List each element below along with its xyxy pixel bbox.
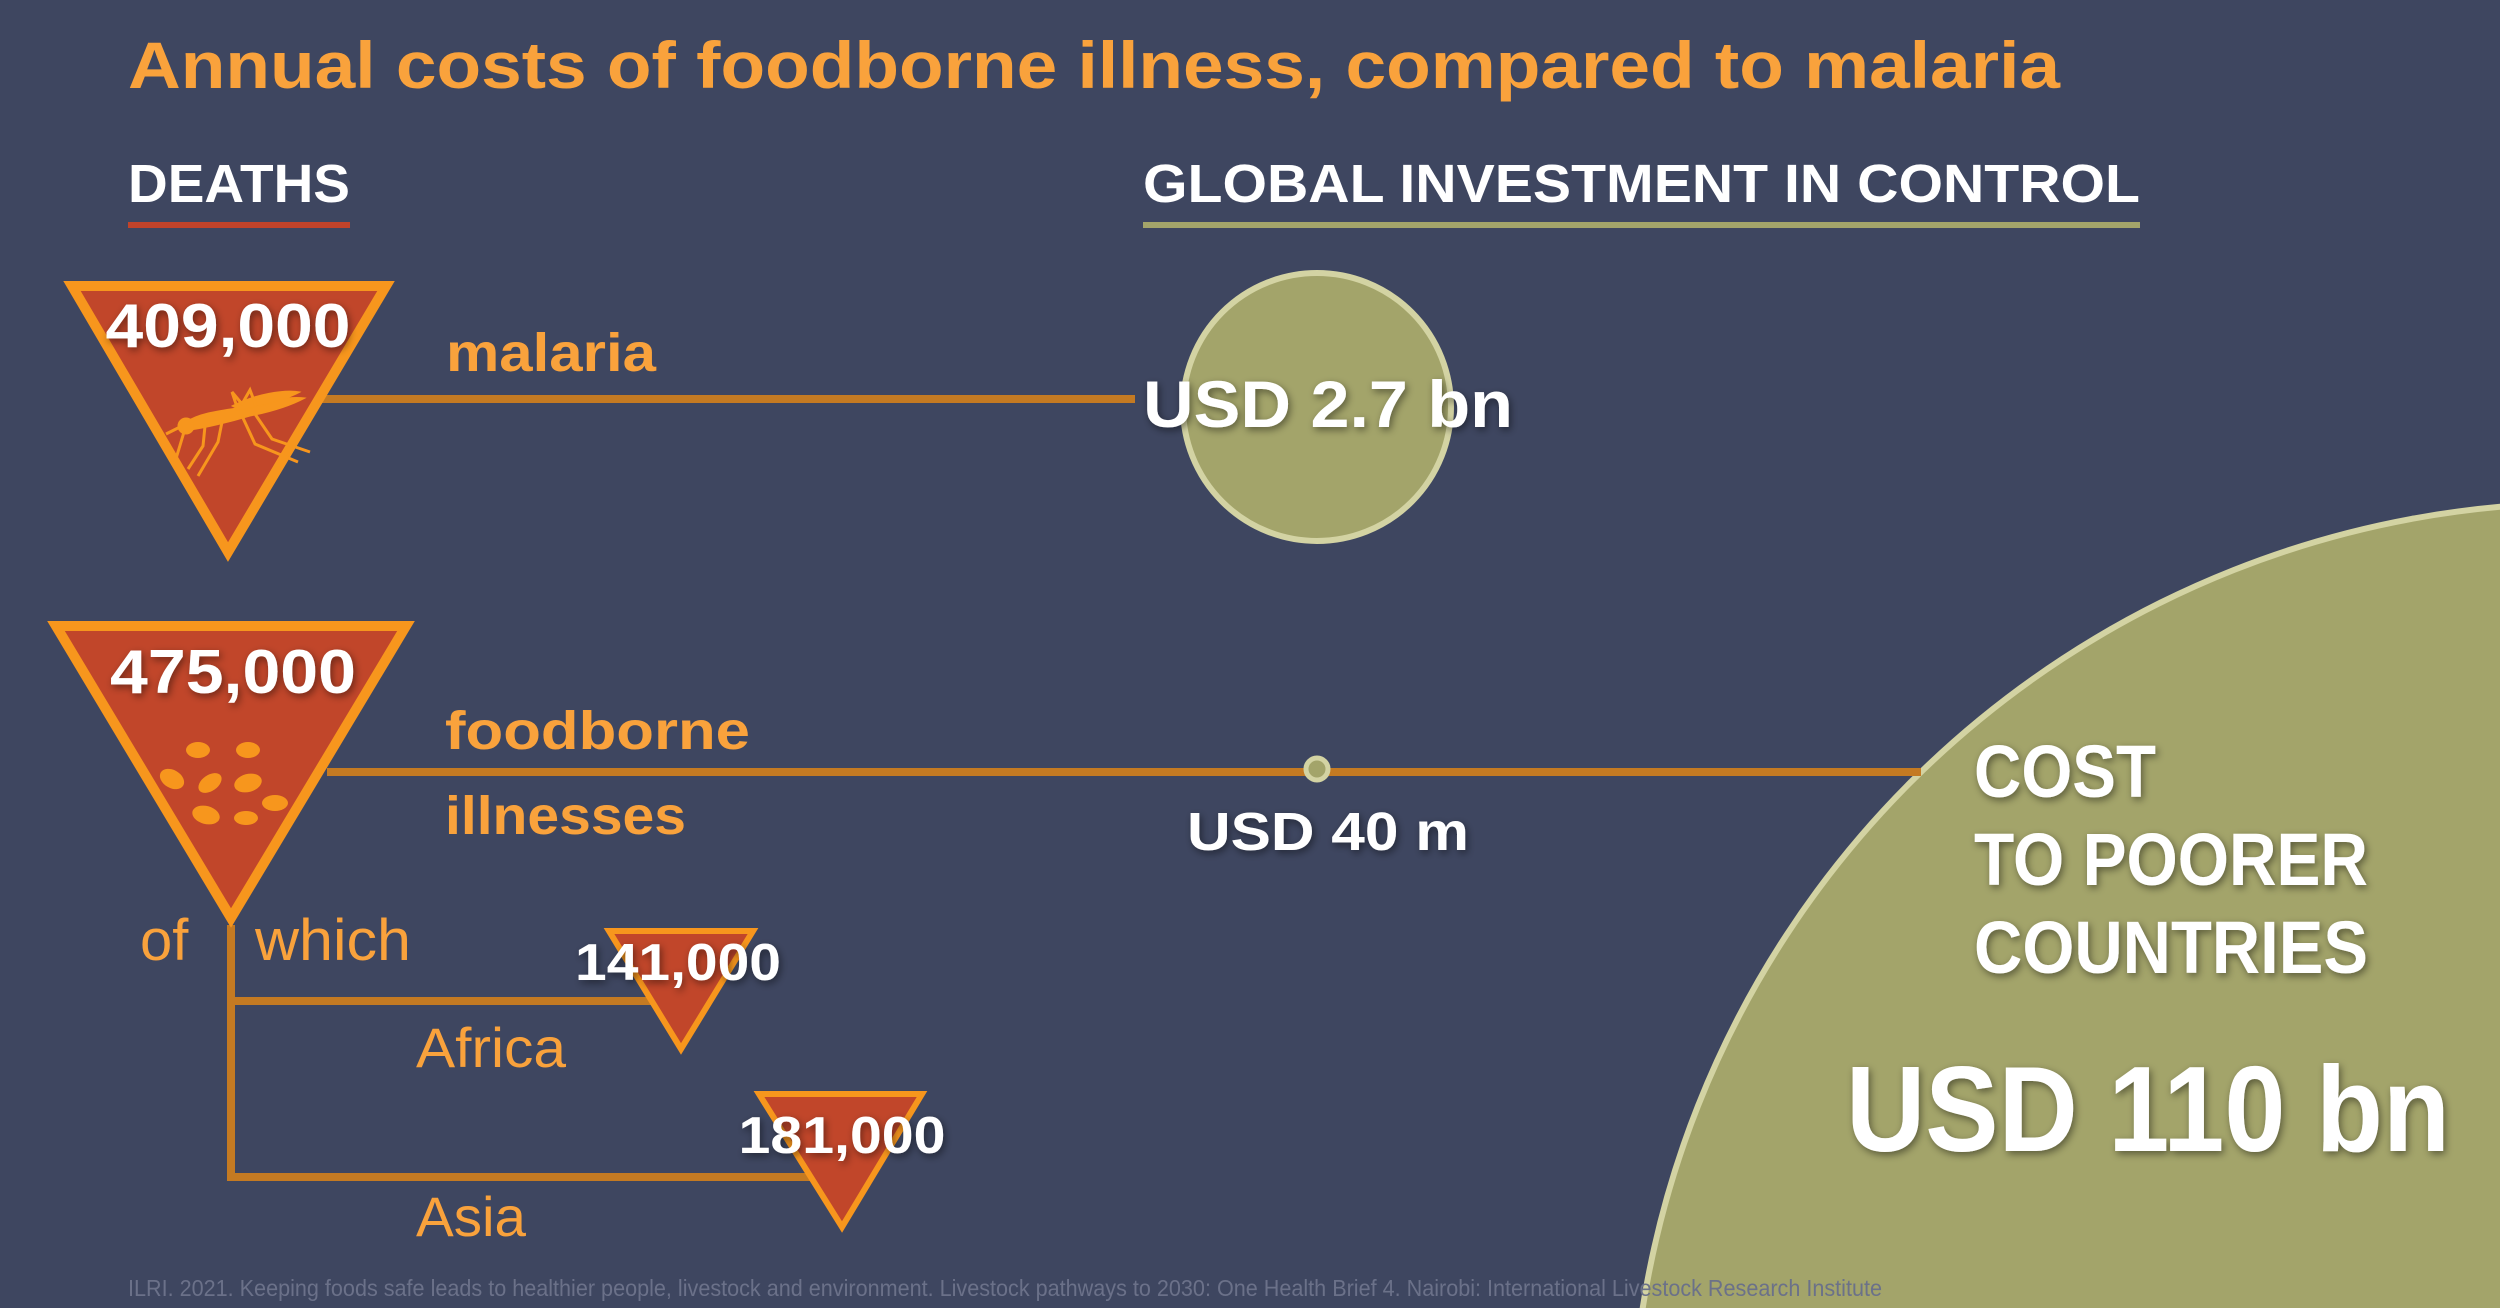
label: Asia: Asia [416, 1185, 527, 1248]
text: cost to poorer countries: COST [1974, 730, 2156, 813]
triangle: Africa deaths: 141,000 [575, 934, 781, 992]
triangle: Asia deaths: 181,000 [738, 1107, 946, 1165]
number: 475,000: 475,000 [110, 638, 356, 707]
heading: deaths: DEATHS [128, 154, 350, 214]
label: of which: which [254, 908, 411, 973]
text: cost to poorer countries: COUNTRIES [1974, 906, 2368, 989]
label: foodborne illnesses: illnesses [445, 786, 686, 846]
title: Annual costs of foodborne illness, compared to malaria [128, 28, 2061, 102]
triangle: Asia deaths [738, 1094, 946, 1227]
icon: bacteria [156, 742, 288, 827]
icon: mosquito [166, 390, 310, 476]
number: 409,000: 409,000 [106, 292, 350, 361]
value: USD 40 m: USD 40 m [1187, 802, 1469, 862]
value: USD 2.7 bn: USD 2.7 bn [1143, 367, 1513, 441]
dot: foodborne investment [1306, 758, 1328, 780]
value: USD 110 bn: USD 110 bn [1846, 1041, 2450, 1177]
text: cost to poorer countries [1974, 730, 2368, 989]
label: of which: of [140, 908, 189, 973]
footer source: ILRI. 2021. Keeping foods safe leads to healthier people, livestock and environment. Livestock pathways to 2030: One Health Brief 4. Nairobi: International Livestock Research Institute [128, 1275, 1882, 1301]
text: cost to poorer countries: TO POORER [1974, 818, 2368, 901]
label: Africa: Africa [416, 1016, 567, 1079]
malaria connector line [319, 395, 1135, 403]
label: of which [140, 908, 411, 973]
label: foodborne illnesses: foodborne [445, 701, 750, 761]
triangle: malaria deaths [72, 286, 386, 552]
tree lines: of which [227, 925, 827, 1181]
big circle: cost to poorer countries [1631, 503, 2500, 1308]
heading: global investment in control: GLOBAL INVESTMENT IN CONTROL [1143, 154, 2140, 214]
label: foodborne illnesses [445, 701, 750, 846]
triangle: foodborne deaths [56, 626, 406, 918]
label: malaria: malaria [446, 323, 657, 383]
triangle: Africa deaths [575, 931, 781, 1049]
circle: malaria investment [1183, 273, 1451, 541]
foodborne connector line [327, 768, 1921, 776]
